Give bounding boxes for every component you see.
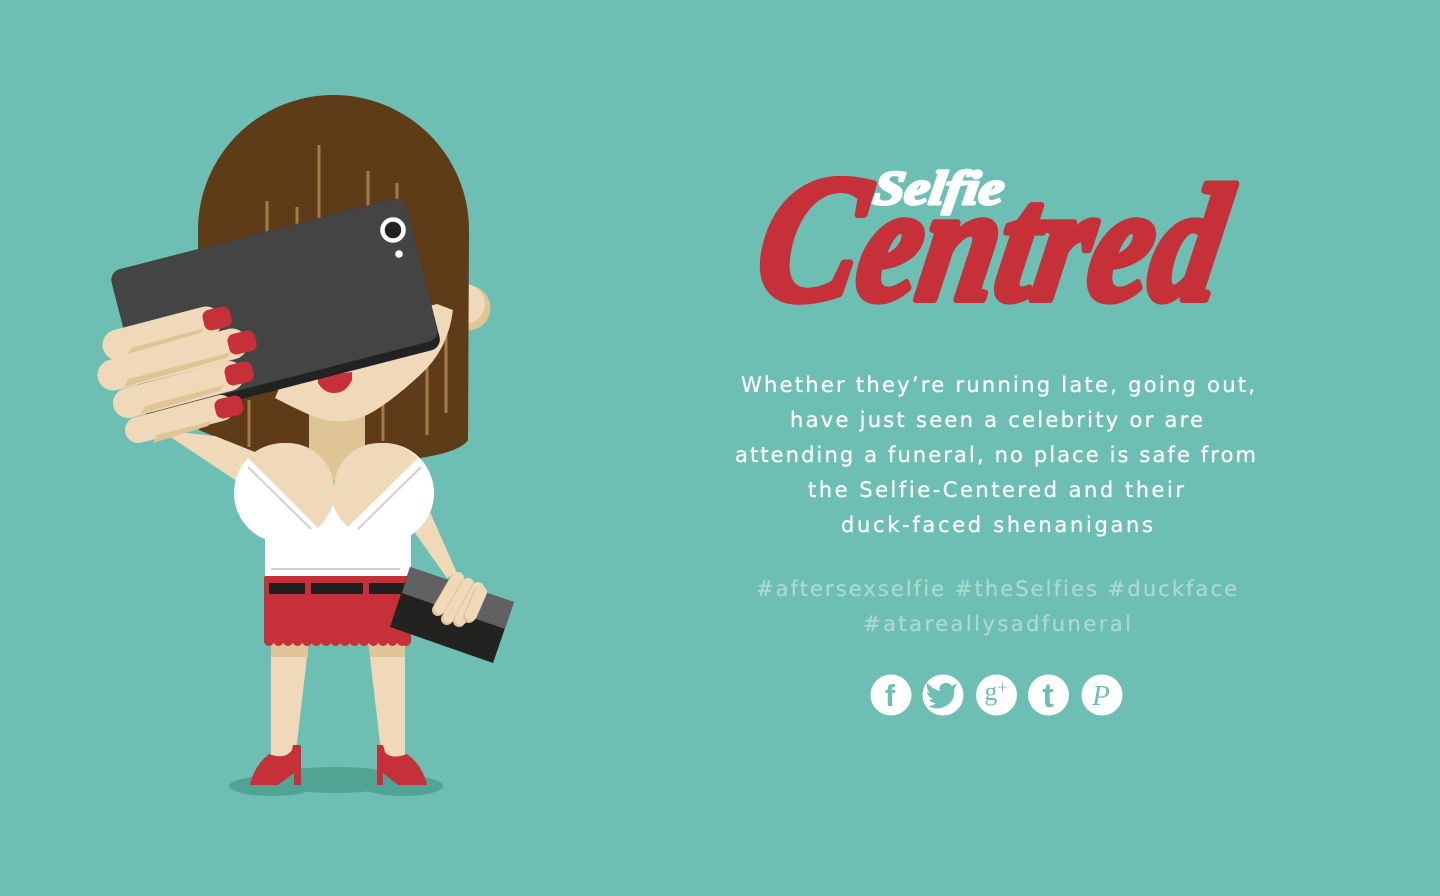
hand holding phone: [113, 305, 258, 443]
illustration: selfie-taking woman: [109, 95, 514, 796]
neck: [309, 400, 365, 480]
description paragraph: Whether they’re running late, going out,: [741, 373, 1255, 397]
clutch bag: [390, 567, 514, 663]
icon: facebook: [870, 674, 912, 716]
hand on bag: [438, 578, 481, 621]
face: [275, 304, 453, 422]
icon: google plus: +: [997, 677, 1008, 697]
logo word: Selfie: Selfie: [870, 162, 1008, 215]
description paragraph: the Selfie-Centered and their: [808, 478, 1184, 502]
red nails: [201, 305, 258, 420]
right arm: [415, 512, 457, 578]
icon: pinterest: P: [1091, 680, 1110, 712]
mouth: [318, 372, 352, 393]
description paragraph: [735, 373, 1256, 537]
ear: [445, 284, 490, 330]
description paragraph: attending a funeral, no place is safe from: [735, 443, 1256, 467]
icon: twitter: [922, 674, 964, 716]
icon: google plus: g: [984, 677, 997, 706]
icon: tumblr: t: [1042, 677, 1054, 715]
hashtags: #aftersexselfie #theSelfies #duckface: [756, 577, 1237, 601]
ground shadow: [229, 767, 443, 796]
icon: google plus: [976, 674, 1017, 716]
hair: [198, 95, 469, 458]
legs: [271, 640, 405, 757]
phone camera: [382, 220, 404, 258]
hashtags: #atareallysadfuneral: [863, 612, 1131, 636]
logo word: Centred: Centred: [744, 139, 1245, 339]
hashtags: [756, 577, 1237, 636]
icon: facebook: f: [885, 678, 896, 713]
skirt: [264, 576, 411, 646]
phone: [109, 196, 442, 423]
top: white blouse: [234, 443, 434, 577]
description paragraph: duck-faced shenanigans: [841, 513, 1153, 537]
description paragraph: have just seen a celebrity or are: [790, 408, 1203, 432]
icon: pinterest: [1082, 674, 1122, 716]
social icons: [870, 674, 1122, 716]
icon: tumblr: [1028, 674, 1069, 716]
logo: Selfie Centred: [744, 139, 1245, 339]
shoes: [250, 745, 427, 785]
raised arm: [160, 430, 255, 482]
